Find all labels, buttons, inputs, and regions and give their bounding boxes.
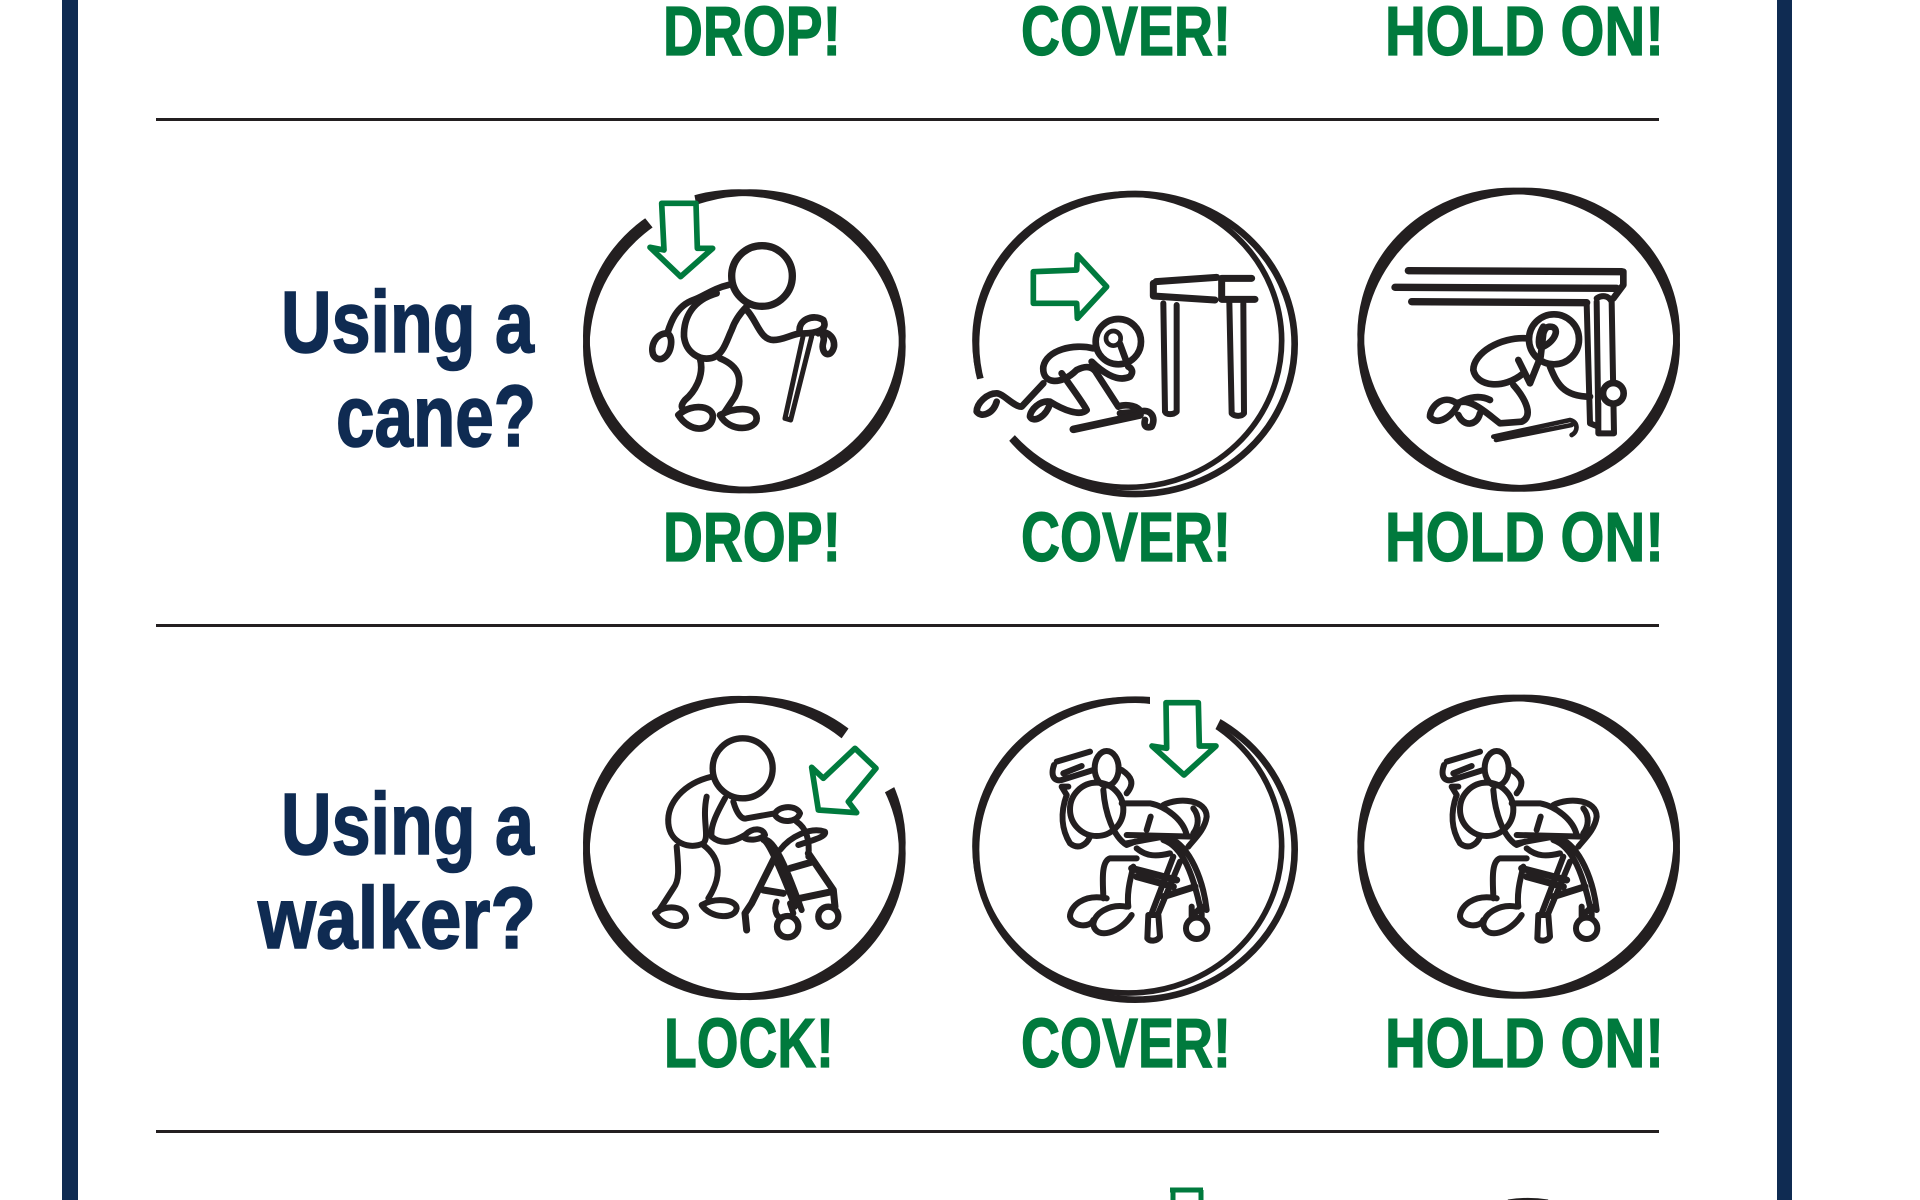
icon: cane hold on (1327, 156, 1710, 524)
icon: walker lock (553, 664, 936, 1032)
row two labels: COVER! (1021, 498, 1231, 576)
icon: walker cover (975, 683, 1295, 1000)
icon: cane drop (553, 157, 936, 525)
question: using a walker: walker? (257, 870, 536, 967)
next row ring top, cropped (1508, 1200, 1548, 1201)
row three labels: COVER! (1021, 1004, 1231, 1082)
question: using a cane: Using a (281, 274, 534, 371)
row three labels: LOCK! (664, 1004, 834, 1082)
row three labels: HOLD ON! (1385, 1004, 1664, 1082)
icon: cane cover (960, 194, 1295, 494)
left border bar (62, 0, 78, 1200)
row two labels: HOLD ON! (1385, 498, 1664, 576)
icon: walker hold on (1327, 663, 1710, 1031)
row two labels (663, 498, 1664, 576)
top row labels (663, 0, 1664, 70)
question: using a walker (257, 776, 536, 967)
row three labels (664, 1004, 1664, 1082)
question: using a cane (281, 274, 536, 465)
next row arrow, cropped (1170, 1190, 1203, 1200)
question: using a cane: cane? (336, 368, 536, 465)
row two labels: DROP! (663, 498, 841, 576)
right border bar (1777, 0, 1792, 1200)
question: using a walker: Using a (281, 776, 534, 873)
